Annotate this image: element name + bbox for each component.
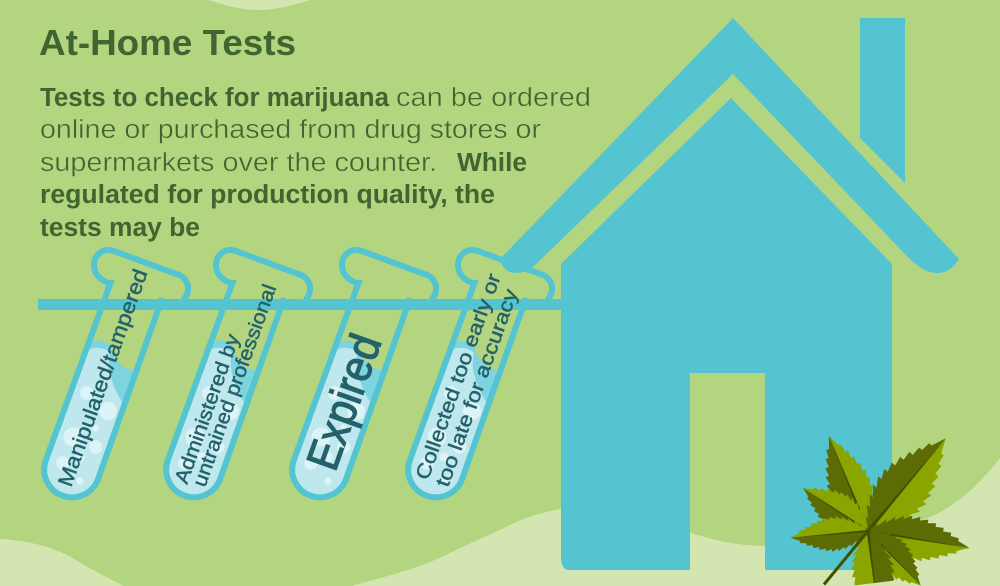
test tube: untrained professional: untrained professional xyxy=(189,282,281,490)
house roof xyxy=(500,18,959,273)
house chimney xyxy=(860,18,905,183)
intro text block: supermarkets over the counter. xyxy=(40,149,437,177)
test tube: manipulated or tampered xyxy=(44,250,188,497)
icon: house xyxy=(500,18,959,570)
test tube: expired: Expired xyxy=(296,327,391,476)
intro text block xyxy=(40,84,591,242)
intro text block: Tests to check for marijuana xyxy=(40,84,390,112)
intro text block: online or purchased from drug stores or xyxy=(40,116,542,144)
test tube: untrained professional: Administered by xyxy=(171,331,244,487)
test tube: manipulated or tampered: Manipulated/tampered xyxy=(54,266,153,490)
intro text block: tests may be xyxy=(40,214,200,242)
intro text block: regulated for production quality, the xyxy=(40,181,495,209)
test tube: collected too early or late: too late for accuracy xyxy=(432,286,522,490)
test tube: expired xyxy=(292,250,436,497)
intro text block: can be ordered xyxy=(396,84,591,112)
intro text block: While xyxy=(457,149,527,177)
test tube rack rod xyxy=(38,299,561,310)
test tube: collected too early or late: Collected too early or xyxy=(412,271,506,483)
icon: cannabis leaf xyxy=(789,421,973,586)
test tube: untrained professional xyxy=(166,250,310,497)
test tube: collected too early or late xyxy=(408,250,552,497)
house body with door xyxy=(561,98,892,570)
title: At-Home Tests xyxy=(39,22,296,63)
